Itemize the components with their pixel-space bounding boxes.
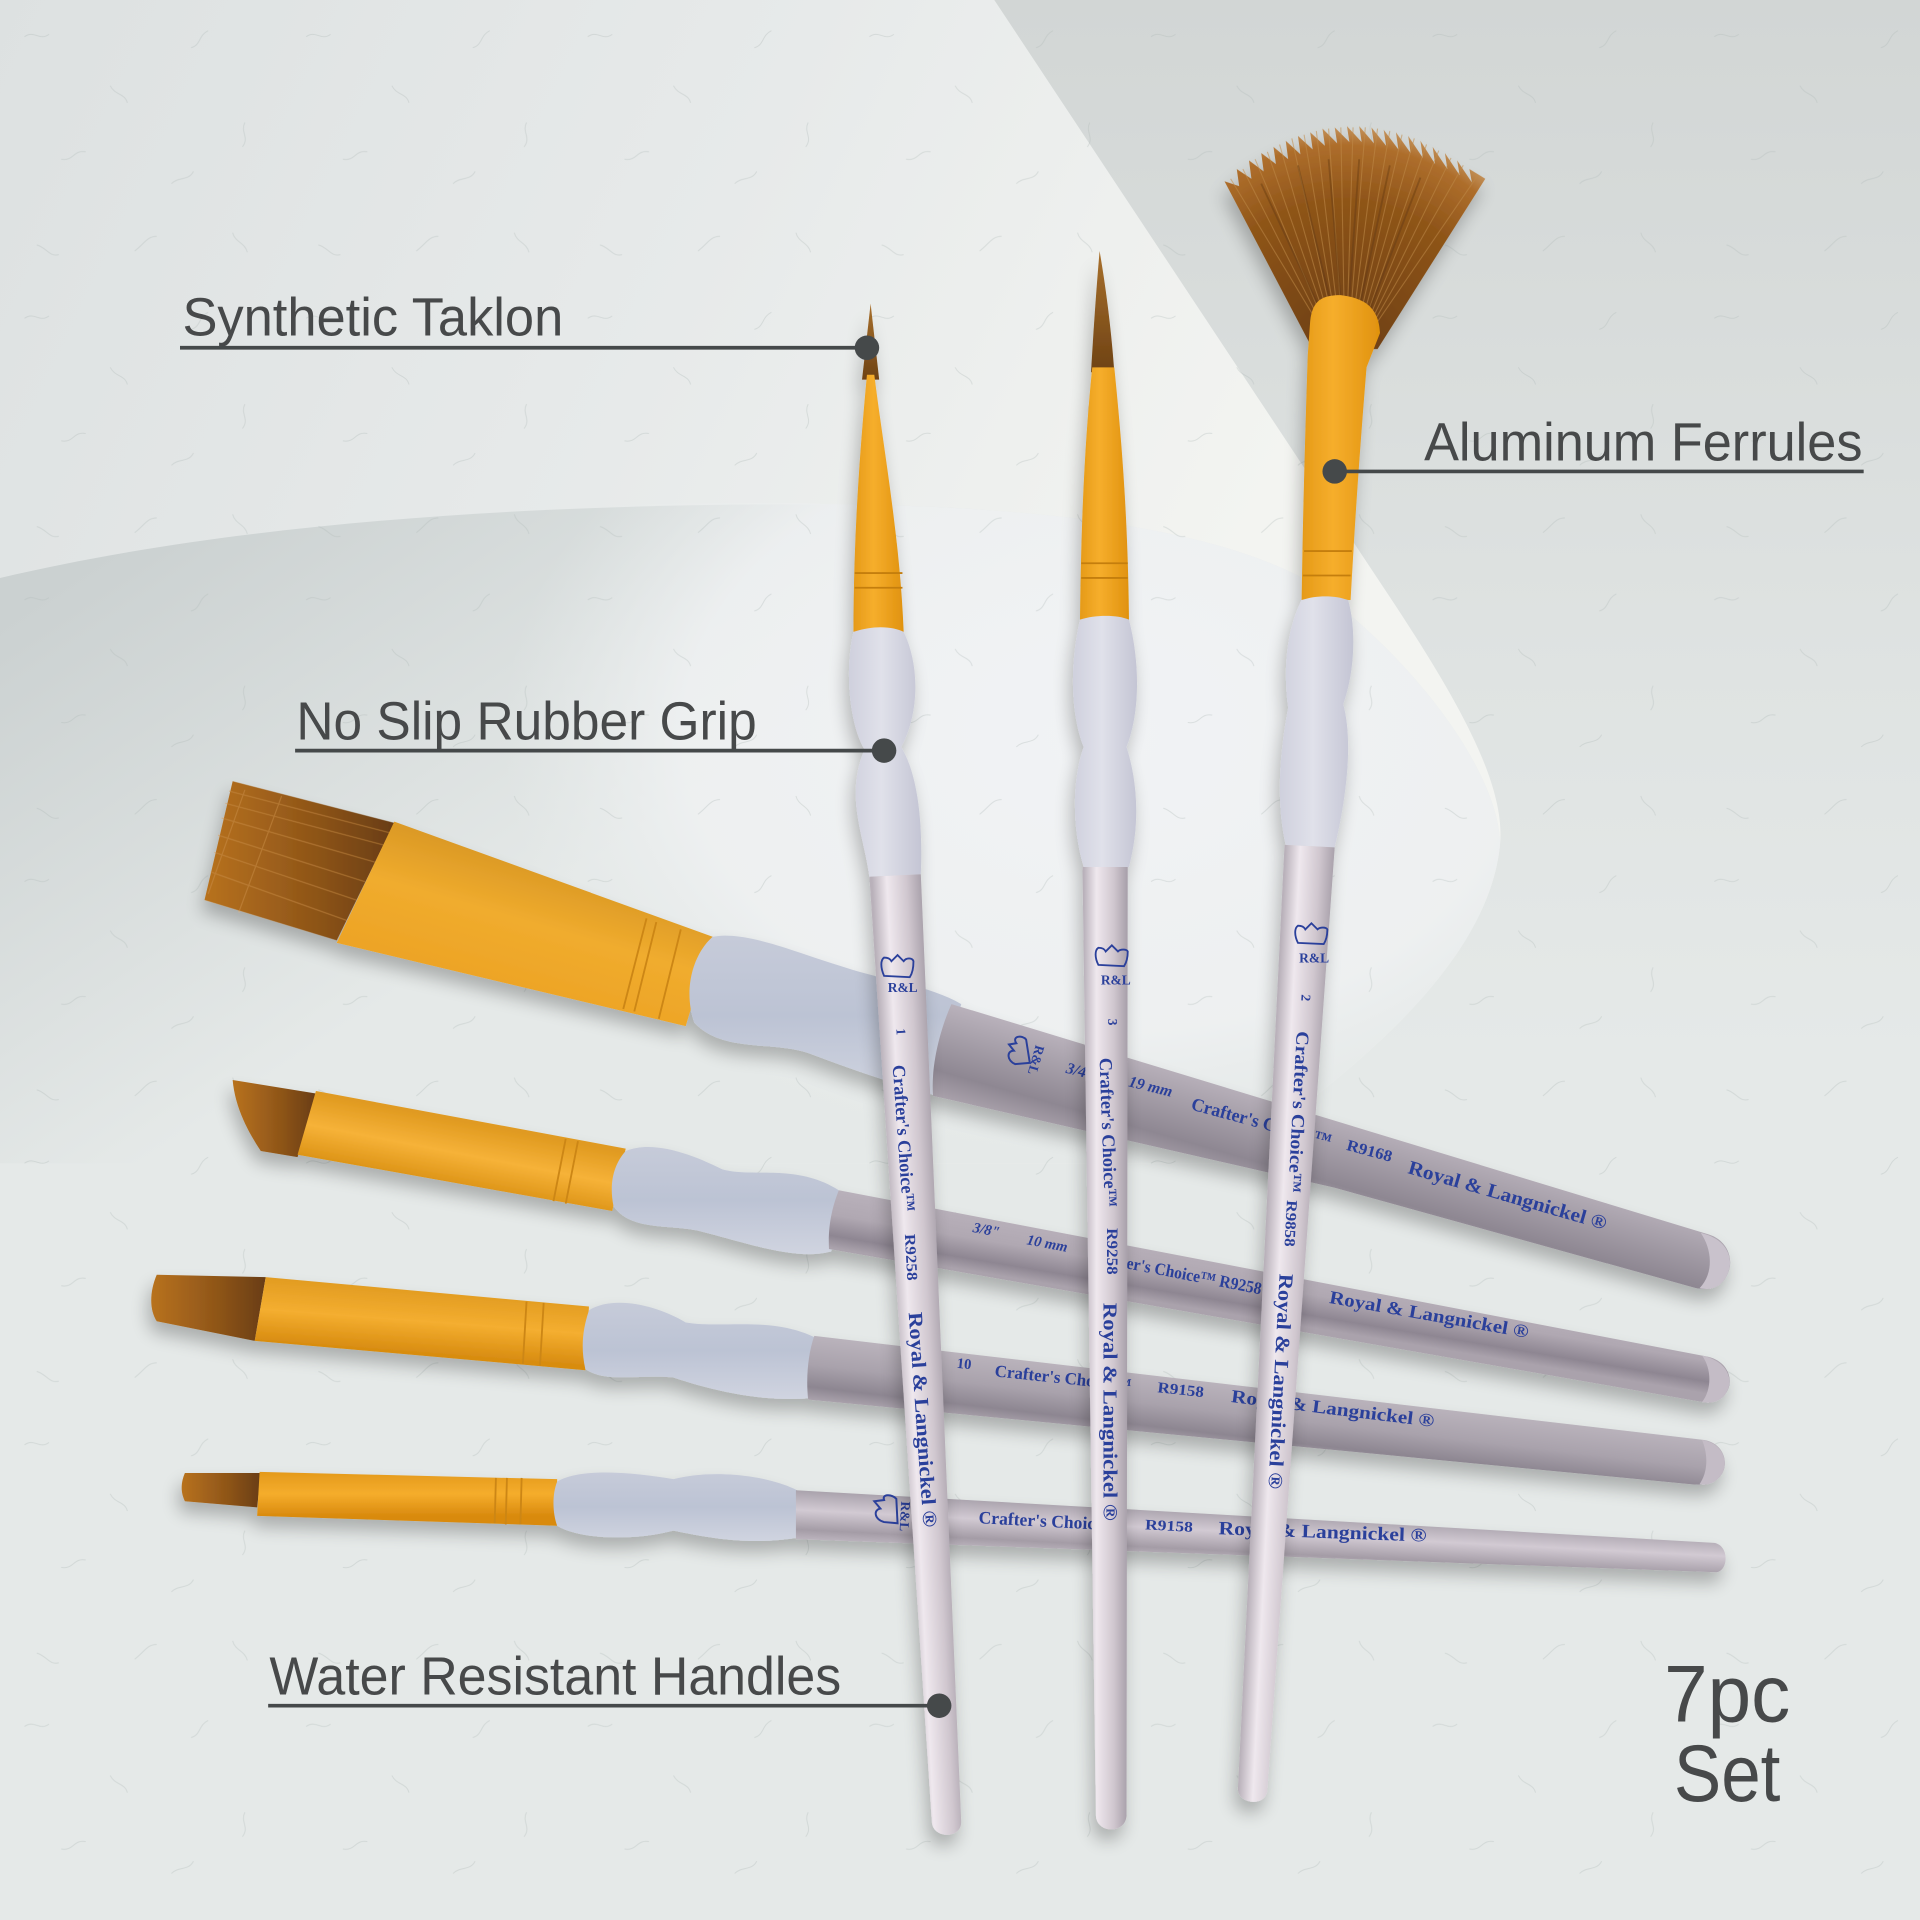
ferrule bands	[1081, 563, 1128, 578]
handle	[1082, 867, 1128, 1829]
handle print	[956, 1356, 1436, 1431]
handle print: R9158	[1145, 1517, 1193, 1536]
grip	[553, 1473, 797, 1541]
handle print: Crafter's Choice™	[889, 1064, 919, 1212]
bristles	[151, 1275, 266, 1341]
callout: Aluminum Ferrules: Aluminum Ferrules	[1424, 412, 1862, 472]
brush: large flat wash	[204, 781, 1730, 1289]
handle print: Royal & Langnickel ®	[1230, 1386, 1436, 1431]
brush: round (middle vertical)	[1073, 251, 1137, 1829]
brush: flat shader	[151, 1275, 1725, 1485]
grip	[849, 627, 921, 877]
callout: No Slip Rubber Grip: No Slip Rubber Grip	[296, 692, 757, 752]
handle print: 3/4"	[1063, 1060, 1097, 1084]
set size label: 7pc	[1664, 1650, 1790, 1740]
handle print: Royal & Langnickel ®	[1406, 1158, 1609, 1235]
handle cap	[1700, 1440, 1725, 1485]
callout: Synthetic Taklon	[180, 288, 879, 360]
ferrule bands	[523, 1302, 544, 1365]
handle print: R&L	[1299, 950, 1329, 965]
ferrule bands	[855, 573, 902, 588]
handle print: 2	[1298, 994, 1314, 1002]
handle print: 19 mm	[1127, 1074, 1174, 1101]
callout: Synthetic Taklon: Synthetic Taklon	[182, 288, 563, 348]
grip	[612, 1147, 839, 1254]
handle	[1238, 845, 1335, 1802]
handle	[807, 1336, 1725, 1485]
handle cap	[1700, 1233, 1730, 1289]
handle	[869, 874, 961, 1835]
callout: No Slip Rubber Grip	[295, 692, 896, 763]
handle print: Royal & Langnickel ®	[1218, 1518, 1427, 1547]
handle print: Royal & Langnickel ®	[1098, 1303, 1120, 1521]
ferrule bands	[553, 1139, 578, 1204]
ferrule bands	[623, 918, 681, 1019]
fan strands dark	[1261, 159, 1420, 331]
handle print: Royal & Langnickel ®	[1328, 1287, 1531, 1342]
bristles	[204, 781, 394, 940]
handle cap	[1702, 1356, 1730, 1403]
ferrule	[257, 1472, 557, 1526]
handle print: 3	[1105, 1019, 1120, 1026]
bristles	[862, 304, 879, 380]
handle print	[1009, 1037, 1609, 1235]
handle	[829, 1190, 1730, 1402]
grip	[689, 936, 961, 1096]
brush: angled shader	[233, 1080, 1730, 1403]
ferrule	[255, 1277, 589, 1370]
handle print: Crafter's Choice™	[1096, 1057, 1121, 1207]
handle print	[1263, 923, 1329, 1490]
handle	[796, 1490, 1726, 1572]
callout: Aluminum Ferrules	[1322, 412, 1864, 484]
brush: liner (left vertical)	[849, 304, 961, 1835]
ferrule	[337, 822, 713, 1026]
handle print: R&L	[1025, 1044, 1047, 1077]
handle print: R9258	[1103, 1228, 1120, 1275]
handle print	[1096, 945, 1131, 1521]
handle print: R9168	[1345, 1137, 1394, 1166]
handle print	[970, 1220, 1531, 1342]
callout: Water Resistant Handles: Water Resistant Handles	[269, 1647, 841, 1707]
handle print: Crafter's Choice™ R9258	[1089, 1247, 1263, 1298]
handle print	[874, 1495, 1427, 1547]
handle print: Royal & Langnickel ®	[904, 1311, 941, 1528]
ferrule bands	[1303, 551, 1352, 576]
brush: small flat	[182, 1472, 1726, 1572]
ferrule	[853, 375, 904, 632]
grip	[1280, 596, 1353, 847]
handle print: 3/8"	[971, 1220, 1001, 1241]
bristles	[1091, 251, 1114, 372]
handle print: Crafter's Choice™	[978, 1507, 1121, 1535]
ferrule	[1080, 367, 1129, 620]
handle print	[881, 955, 941, 1528]
set size label	[1664, 1650, 1790, 1819]
handle	[933, 1004, 1730, 1289]
grip	[583, 1303, 814, 1399]
handle print: R&L	[888, 980, 918, 995]
handle print: R&L	[1101, 972, 1131, 987]
handle print: 1	[893, 1028, 909, 1036]
handle print: R&L	[897, 1501, 913, 1532]
bristles	[233, 1080, 316, 1157]
handle print: Crafter's Choice™	[1189, 1094, 1334, 1151]
ferrule	[298, 1091, 626, 1211]
handle print: Crafter's Choice™	[1284, 1031, 1313, 1193]
grip	[1073, 616, 1137, 867]
handle print: Royal & Langnickel ®	[1263, 1273, 1297, 1490]
brush: fan (right vertical)	[1224, 126, 1485, 1802]
handle print: 10	[956, 1356, 972, 1373]
handle print: Crafter's Choice™	[994, 1361, 1132, 1395]
handle print: R9158	[1157, 1379, 1205, 1401]
set size label: Set	[1674, 1729, 1780, 1819]
fan bristles	[1224, 126, 1485, 349]
ferrule bands	[495, 1478, 522, 1524]
handle print: R9258	[901, 1234, 920, 1281]
ferrule	[1302, 295, 1380, 600]
handle print: 10 mm	[1025, 1232, 1069, 1256]
fan strands light	[1231, 127, 1478, 331]
bristles	[182, 1473, 261, 1507]
handle print: R9858	[1280, 1200, 1300, 1248]
